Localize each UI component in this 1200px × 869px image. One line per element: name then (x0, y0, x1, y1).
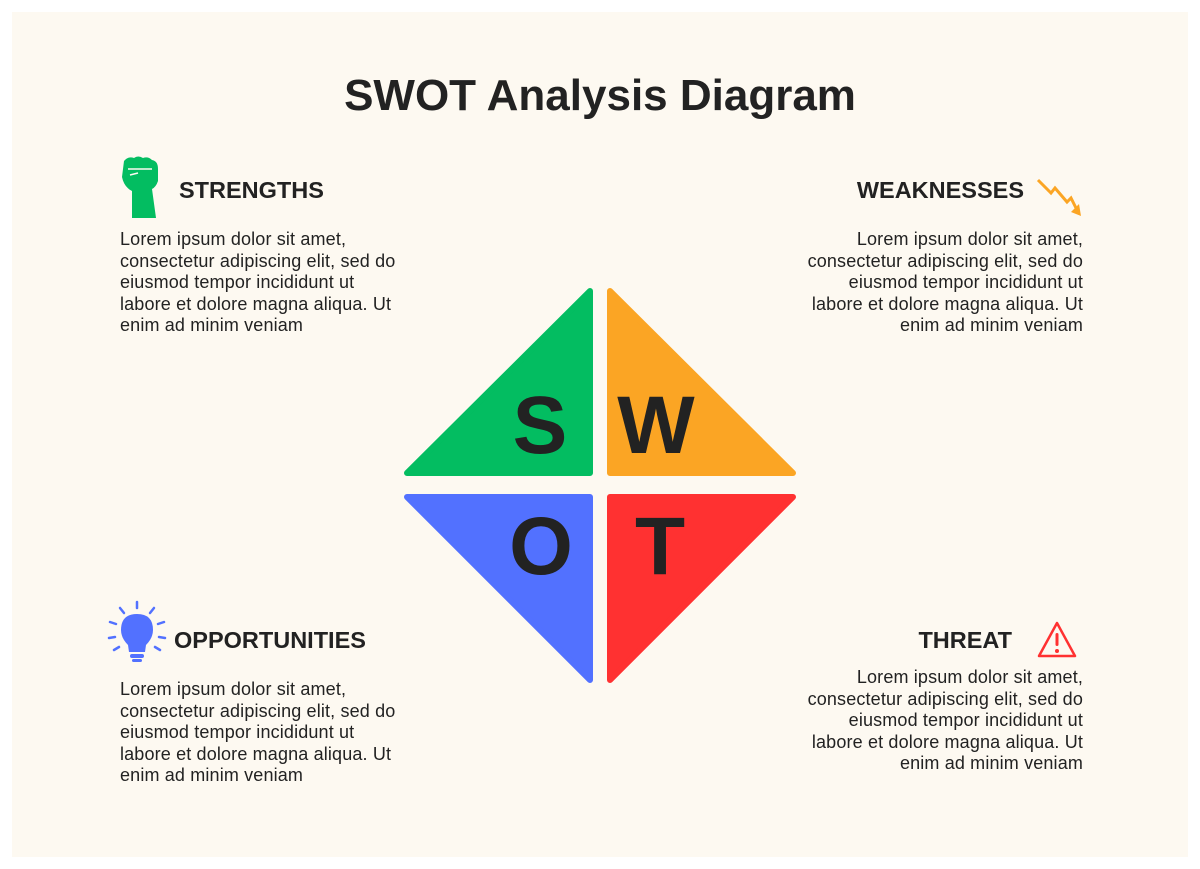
text: threat: enim ad minim veniam (900, 753, 1083, 773)
icon: warning (1038, 622, 1076, 658)
heading: strengths: STRENGTHS (179, 177, 324, 203)
segment: W (610, 291, 793, 473)
text: strengths: labore et dolore magna aliqua. Ut (120, 294, 391, 314)
letter S: S (513, 380, 567, 471)
icon: fist (122, 156, 158, 218)
segment: S (407, 291, 590, 473)
text: threat: eiusmod tempor incididunt ut (849, 710, 1083, 730)
letter T: T (635, 501, 685, 592)
text: strengths: eiusmod tempor incididunt ut (120, 272, 354, 292)
text: weaknesses: enim ad minim veniam (900, 315, 1083, 335)
text: threat (808, 667, 1083, 773)
text: opportunities: eiusmod tempor incididunt ut (120, 722, 354, 742)
text: opportunities: consectetur adipiscing elit, sed do (120, 701, 395, 721)
heading: weaknesses: WEAKNESSES (857, 177, 1024, 203)
segment: O (407, 497, 590, 680)
text: threat: labore et dolore magna aliqua. Ut (812, 732, 1083, 752)
icon: down arrow (1037, 179, 1081, 216)
text: weaknesses: consectetur adipiscing elit, sed do (808, 251, 1083, 271)
text: weaknesses (808, 229, 1083, 335)
icon: bulb (108, 600, 166, 662)
text: opportunities: enim ad minim veniam (120, 765, 303, 785)
text: opportunities: Lorem ipsum dolor sit amet, (120, 679, 346, 699)
heading: threat: THREAT (918, 627, 1012, 653)
text: threat: consectetur adipiscing elit, sed do (808, 689, 1083, 709)
text: opportunities: labore et dolore magna aliqua. Ut (120, 744, 391, 764)
text: opportunities (120, 679, 395, 785)
segment: T (610, 497, 793, 680)
text: weaknesses: Lorem ipsum dolor sit amet, (857, 229, 1083, 249)
text: strengths (120, 229, 395, 335)
text: strengths: Lorem ipsum dolor sit amet, (120, 229, 346, 249)
letter W: W (617, 380, 695, 471)
text: weaknesses: eiusmod tempor incididunt ut (849, 272, 1083, 292)
title: SWOT Analysis Diagram (344, 71, 856, 120)
text: threat: Lorem ipsum dolor sit amet, (857, 667, 1083, 687)
text: strengths: consectetur adipiscing elit, sed do (120, 251, 395, 271)
text: strengths: enim ad minim veniam (120, 315, 303, 335)
heading: opportunities: OPPORTUNITIES (174, 627, 366, 653)
text: weaknesses: labore et dolore magna aliqua. Ut (812, 294, 1083, 314)
letter O: O (509, 501, 573, 592)
